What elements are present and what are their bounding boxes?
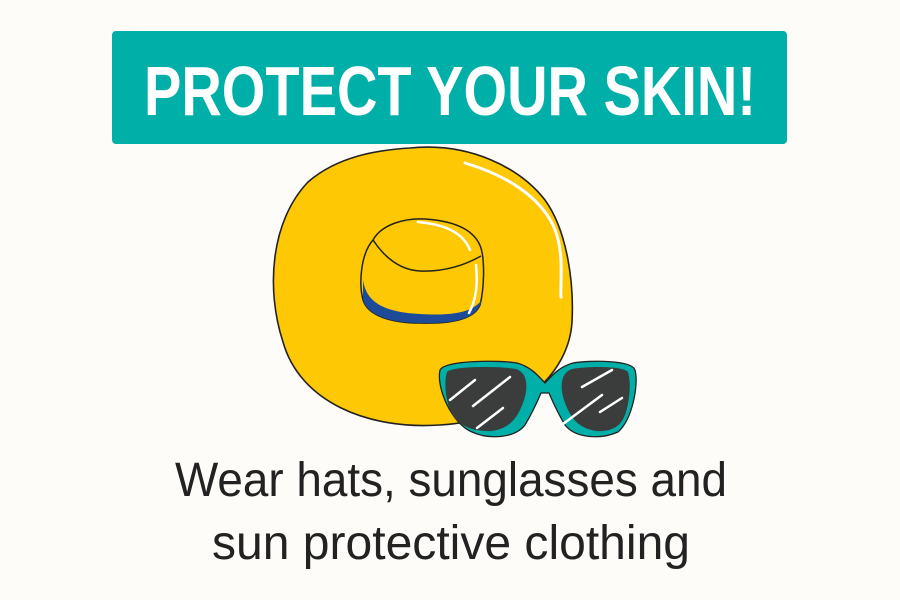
title banner: [112, 31, 787, 144]
text: caption: sun protective clothing: [212, 517, 690, 570]
text: caption: Wear hats, sunglasses and: [175, 454, 727, 507]
icon: sunglasses: [439, 361, 636, 437]
icon: sun hat: [273, 147, 572, 426]
text: caption: [175, 454, 727, 570]
title banner: PROTECT YOUR SKIN!: [144, 52, 756, 130]
